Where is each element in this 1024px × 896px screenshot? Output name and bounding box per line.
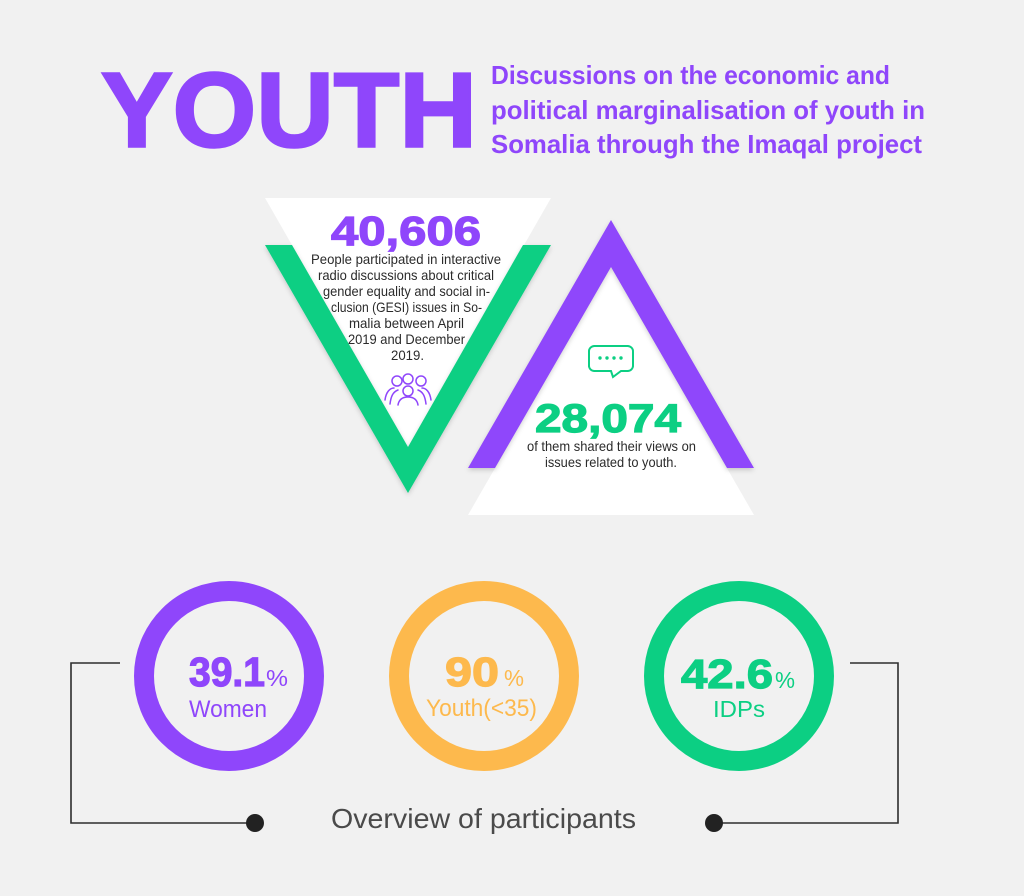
donut: women: Women xyxy=(189,696,267,723)
description text xyxy=(527,438,696,470)
title: YOUTH xyxy=(101,52,477,170)
icon: group of people xyxy=(385,374,431,405)
donut: youth: 90 xyxy=(445,649,499,695)
description text xyxy=(311,251,501,363)
donut: youth: % xyxy=(504,665,524,691)
subtitle: political marginalisation of youth in xyxy=(491,95,925,125)
connector: left bracket xyxy=(71,663,264,832)
description text: 2019. xyxy=(391,347,424,363)
donut: women: 39.1 xyxy=(189,649,265,695)
description text: radio discussions about critical xyxy=(318,267,494,283)
caption: overview of participants: Overview of participants xyxy=(331,803,636,834)
donut: IDPs xyxy=(654,591,824,761)
description text: malia between April xyxy=(349,315,464,331)
panel: 40,606 participants triangle xyxy=(265,198,551,493)
description text: 2019 and December xyxy=(348,331,465,347)
connector: right bracket xyxy=(705,663,898,832)
donut: IDPs: % xyxy=(775,667,795,693)
donut: youth xyxy=(399,591,569,761)
donut: IDPs: 42.6 xyxy=(681,651,773,697)
description text: People participated in interactive xyxy=(311,251,501,267)
description text: gender equality and social in- xyxy=(323,283,490,299)
subtitle: Somalia through the Imaqal project xyxy=(491,129,922,159)
donut: youth: Youth(<35) xyxy=(426,695,537,722)
donut: women xyxy=(144,591,314,761)
statistic: 40,606: 40,606 xyxy=(331,208,481,254)
statistic: 28,074: 28,074 xyxy=(535,397,682,441)
purple triangle frame xyxy=(468,220,754,468)
donut: IDPs: IDPs xyxy=(713,696,765,722)
description text: clusion (GESI) issues in So- xyxy=(331,299,482,315)
icon: speech bubble xyxy=(589,346,633,377)
subtitle: Discussions on the economic and xyxy=(491,60,890,90)
panel: 28,074 views triangle xyxy=(468,220,754,515)
description text: issues related to youth. xyxy=(545,454,677,470)
donut: women: % xyxy=(266,665,288,691)
green V frame xyxy=(265,245,551,493)
subtitle xyxy=(491,60,925,159)
description text: of them shared their views on xyxy=(527,438,696,454)
